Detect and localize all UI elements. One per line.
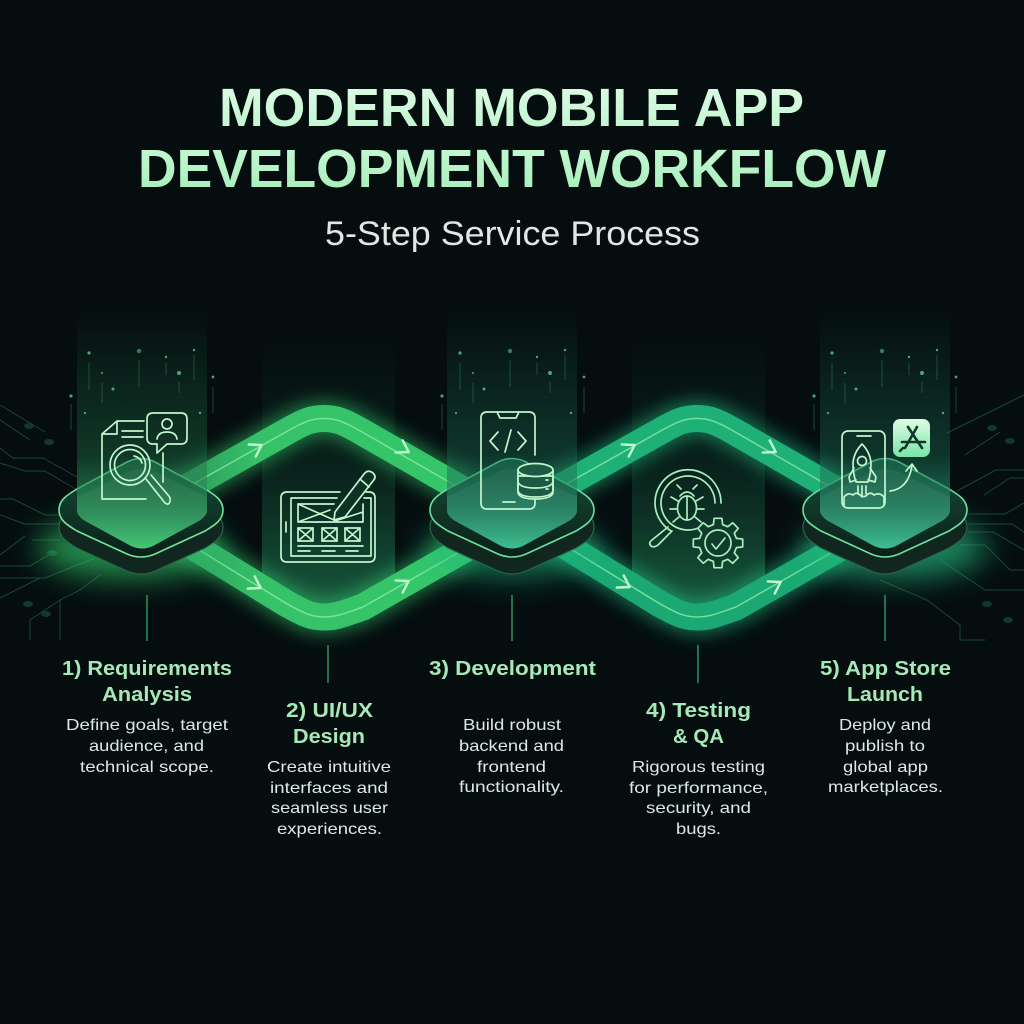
- heading: step 1: [62, 658, 232, 706]
- description: step 4: for performance,: [629, 780, 768, 797]
- description: step 2: experiences.: [277, 821, 382, 838]
- description: step 1: technical scope.: [80, 759, 214, 776]
- heading: step 4: [646, 700, 751, 748]
- icon: rocket phone, store tile and arrow: [842, 431, 917, 508]
- heading: step 2: 2) UI/UX: [286, 700, 374, 722]
- heading: step 5: [820, 658, 951, 706]
- circuit traces: right: [880, 395, 1024, 640]
- platform: step 3: [430, 458, 594, 574]
- arrowheads on ribbons: [248, 439, 784, 594]
- description: step 4: security, and: [646, 800, 751, 817]
- description: step 3: Build robust: [463, 717, 562, 734]
- light column: step 3: [447, 310, 577, 548]
- icon: tablet wireframe and pen: [281, 471, 375, 562]
- node glows: [38, 518, 987, 578]
- description: step 3: backend and: [459, 738, 564, 755]
- description: step 2: interfaces and: [270, 780, 388, 797]
- description: step 4: [629, 759, 768, 838]
- particles: step 1: [69, 349, 214, 430]
- heading: step 1: 1) Requirements: [62, 658, 232, 680]
- title: DEVELOPMENT WORKFLOW: [138, 139, 886, 199]
- description: step 2: seamless user: [271, 800, 389, 817]
- description: step 5: [828, 717, 943, 796]
- description: step 5: global app: [843, 759, 928, 776]
- step 4 text: [629, 700, 768, 838]
- description: step 3: [459, 717, 564, 796]
- icon: document, magnifier and user bubble: [102, 413, 187, 504]
- step 2 text: [267, 700, 391, 838]
- description: step 1: Define goals, target: [66, 717, 229, 734]
- description: step 1: audience, and: [89, 738, 204, 755]
- description: step 3: functionality.: [459, 779, 564, 796]
- description: step 3: frontend: [477, 759, 546, 776]
- description: step 5: marketplaces.: [828, 779, 943, 796]
- connector lines to labels: [147, 595, 885, 683]
- particles: step 5: [812, 349, 957, 430]
- heading: step 3: 3) Development: [429, 658, 596, 680]
- description: step 2: Create intuitive: [267, 759, 391, 776]
- particles: step 3: [440, 349, 585, 430]
- title: MODERN MOBILE APP: [219, 78, 804, 138]
- description: step 1: [66, 717, 229, 776]
- heading: step 1: Analysis: [102, 684, 192, 706]
- circuit traces: left: [0, 405, 100, 640]
- description: step 5: Deploy and: [839, 717, 931, 734]
- description: step 4: bugs.: [676, 821, 721, 838]
- heading: step 4: 4) Testing: [646, 700, 751, 722]
- icon: phone with code and database: [481, 412, 553, 509]
- description: step 2: [267, 759, 391, 838]
- icon: app store tile: [893, 419, 930, 457]
- platform: step 1: [59, 458, 223, 574]
- panel column: step 2 backdrop: [262, 340, 395, 617]
- heading: step 2: [286, 700, 374, 748]
- light column: step 1: [77, 310, 207, 548]
- heading: step 5: 5) App Store: [820, 658, 951, 680]
- platform: step 5: [803, 458, 967, 574]
- step 1 text: [62, 658, 232, 776]
- light column: step 5: [820, 310, 950, 548]
- step 3 text: [429, 658, 596, 796]
- heading: step 5: Launch: [847, 684, 923, 706]
- panel column: step 4 backdrop: [632, 340, 765, 617]
- step 5 text: [820, 658, 951, 796]
- subtitle: 5-Step Service Process: [325, 215, 700, 253]
- heading: step 2: Design: [293, 726, 365, 748]
- heading: step 4: & QA: [673, 726, 724, 748]
- description: step 4: Rigorous testing: [632, 759, 765, 776]
- title: [138, 78, 886, 199]
- flow ribbons: step 1 to step 3: [170, 418, 470, 617]
- icon: bug magnifier and gear: [650, 470, 743, 568]
- flow ribbons: step 3 to step 5: [543, 418, 843, 617]
- description: step 5: publish to: [845, 738, 925, 755]
